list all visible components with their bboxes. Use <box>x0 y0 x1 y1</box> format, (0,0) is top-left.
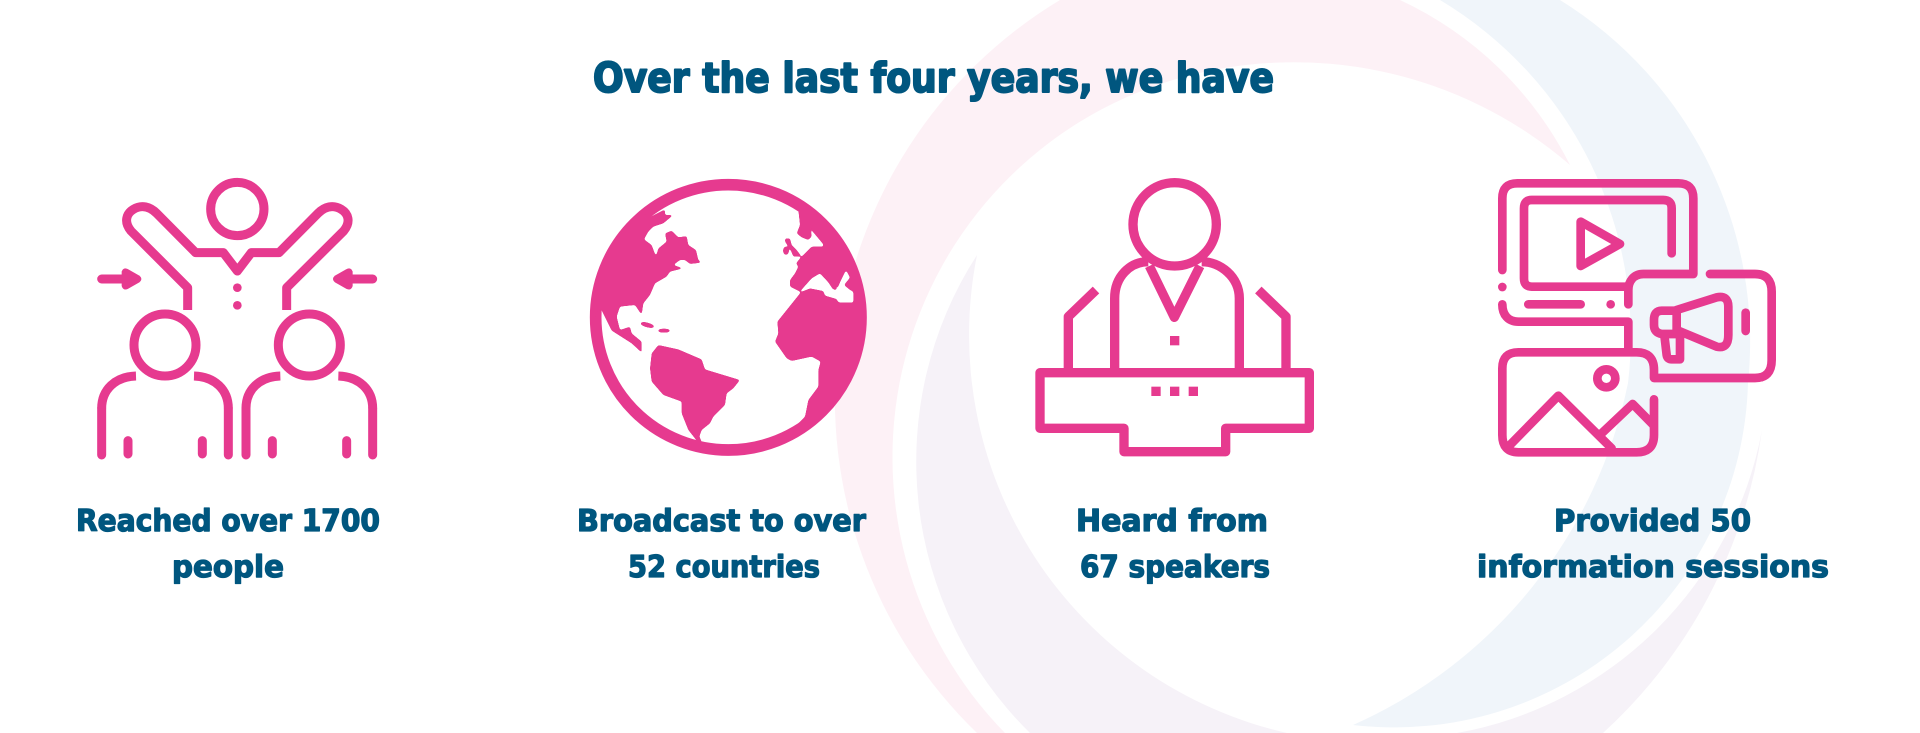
label: broadcast: 52 countries <box>628 550 820 585</box>
label: reached <box>76 504 380 585</box>
icon: media sessions <box>1498 183 1772 452</box>
background swirl <box>835 0 1762 733</box>
label: sessions <box>1477 504 1829 585</box>
label: sessions: Provided 50 <box>1554 504 1751 539</box>
icon: speaker at podium <box>1040 183 1309 452</box>
label: broadcast <box>577 504 866 585</box>
label: broadcast: Broadcast to over <box>577 504 866 539</box>
icon: globe <box>587 185 870 450</box>
label: speakers: 67 speakers <box>1080 550 1270 585</box>
label: reached: people <box>172 550 284 585</box>
label: sessions: information sessions <box>1477 550 1829 585</box>
title: Over the last four years, we have <box>593 54 1274 102</box>
label: reached: Reached over 1700 <box>76 504 380 539</box>
icon: audience with presenter <box>102 182 373 455</box>
label: speakers: Heard from <box>1076 504 1268 539</box>
label: speakers <box>1076 504 1270 585</box>
